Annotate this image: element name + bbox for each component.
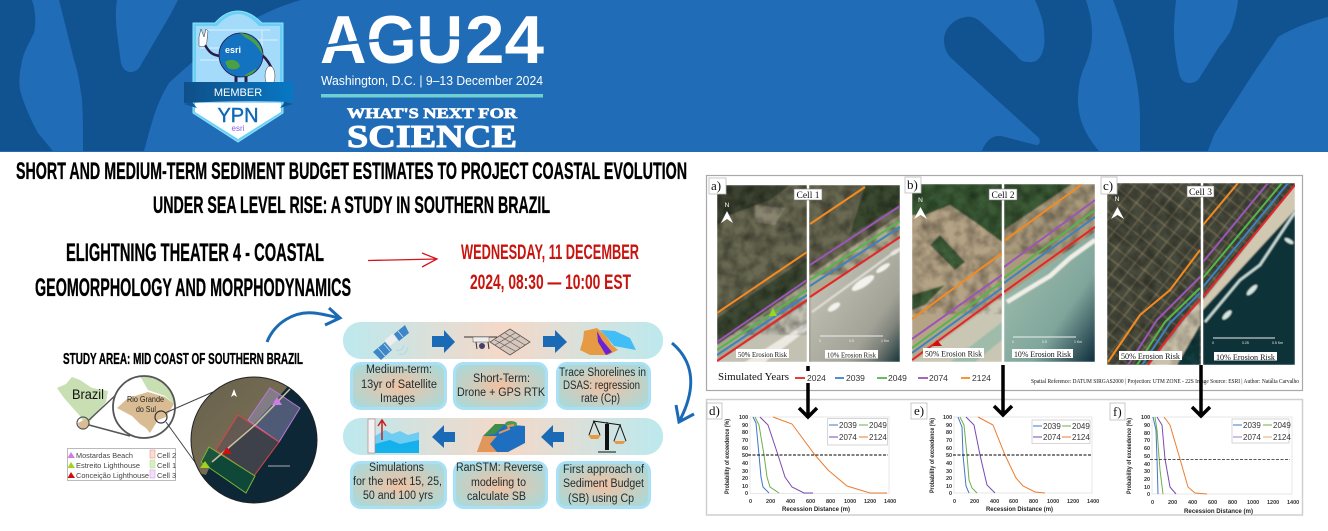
chart e: 20	[946, 476, 952, 482]
label e	[911, 403, 927, 419]
legend e: 2074	[1043, 433, 1061, 442]
chart d: Probability of exceedence (%)	[724, 419, 731, 494]
legend: simulated years: 2039	[846, 373, 865, 383]
label f	[1110, 403, 1125, 420]
chart f: 20	[1144, 477, 1150, 483]
chart e: 90	[946, 423, 952, 429]
cell 2 label: Cell 2	[992, 191, 1015, 201]
legend d	[828, 418, 888, 445]
map c: cell 3: 0	[1212, 341, 1214, 345]
icon: drone and survey grid	[464, 329, 530, 355]
chart f: 0	[1151, 500, 1154, 506]
legend: study area: Cell 1	[157, 461, 176, 470]
Brazil map: Brazil	[72, 386, 104, 402]
panel: exceedance charts	[706, 400, 1302, 515]
chart f: 90	[1144, 423, 1150, 429]
AGU24 logo: SCIENCE	[347, 118, 517, 154]
chart d: 200	[766, 499, 775, 505]
AGU24 logo: AGU	[320, 2, 463, 78]
title	[16, 158, 687, 219]
north arrow	[1111, 196, 1124, 219]
chart e: 100	[943, 415, 952, 421]
box: first approach: (SB) using Cp	[568, 493, 634, 505]
legend: simulated years: 2124	[972, 373, 991, 383]
icon: balance scale	[588, 421, 626, 452]
map dividers	[808, 198, 1202, 365]
chart d: 600	[806, 499, 815, 505]
box: first approach: Sediment Budget	[563, 478, 645, 490]
badge: Esri YPN member: YPN	[217, 105, 259, 127]
icon: terrain block model	[477, 421, 525, 452]
icon: sea level chart	[368, 419, 419, 453]
box: medium-term: Images	[380, 393, 415, 405]
arrow: session to date	[368, 253, 437, 267]
chart f: 60	[1144, 446, 1150, 452]
icon: satellite	[373, 325, 409, 360]
north arrow	[914, 197, 927, 219]
session name	[35, 239, 351, 302]
legend d: 2124	[869, 433, 887, 442]
chart e: 0	[949, 491, 952, 497]
map b: cell 2: 0.5	[1042, 340, 1047, 344]
label a: a)	[711, 178, 721, 193]
chart f: 40	[1144, 462, 1150, 468]
chart e: 200	[970, 499, 979, 505]
50% erosion label: 50% Erosion Risk	[1121, 352, 1180, 361]
box: trace shorelines: rate (Cp)	[581, 393, 620, 405]
north arrow	[721, 202, 733, 223]
legend: simulated years: 2074	[929, 373, 948, 383]
legend f: 2049	[1273, 421, 1291, 430]
chart f: Recession Distance (m)	[1184, 508, 1253, 515]
chart f: 70	[1144, 438, 1150, 444]
legend: study area: Estreito Lighthouse	[76, 461, 140, 470]
chart f: 400	[1188, 500, 1197, 506]
10% erosion label: 10% Erosion Risk	[1216, 353, 1275, 362]
chart d: 90	[742, 423, 748, 429]
label a	[709, 178, 726, 194]
chart d: 1200	[864, 499, 876, 505]
box: simulations: for the next 15, 25,	[353, 476, 442, 488]
box: medium-term: Medium-term:	[366, 364, 432, 376]
label c	[1101, 177, 1117, 194]
box: first approach	[558, 462, 650, 508]
map b: cell 2: 0	[1012, 340, 1014, 344]
arrow: study area to workflow	[267, 308, 340, 342]
chart e: 600	[1009, 499, 1018, 505]
box: trace shorelines: DSAS: regression	[563, 380, 640, 392]
map: study area locator	[57, 376, 317, 503]
chart e: 80	[946, 430, 952, 436]
north arrow: N	[918, 197, 923, 204]
panel: erosion risk maps	[706, 176, 1302, 390]
chart f: 1000	[1247, 500, 1259, 506]
arrow: drone to DSAS	[543, 330, 567, 353]
legend: study area	[68, 448, 176, 480]
legend f: 2074	[1243, 433, 1261, 442]
map c: cell 3: 0.5 Km	[1272, 341, 1283, 345]
chart f	[1110, 403, 1299, 515]
cell 3 label: Cell 3	[1189, 188, 1212, 198]
chart e: 0	[953, 499, 956, 505]
legend f: 2124	[1273, 433, 1291, 442]
chart d	[707, 403, 896, 513]
Rio Grande do Sul inset: do Sul	[136, 405, 156, 414]
box: RanSTM: modeling to	[471, 477, 526, 489]
arrow: cell 1 to chart d	[799, 366, 817, 417]
chart d: 60	[742, 446, 748, 452]
box: simulations: 50 and 100 yrs	[363, 490, 433, 502]
ribbon: MEMBER	[214, 87, 262, 99]
arrow: model to simulations	[432, 425, 455, 448]
chart f: 600	[1208, 500, 1217, 506]
chart f: 100	[1141, 415, 1150, 421]
chart d: 0	[749, 499, 752, 505]
chart d: Recession Distance (m)	[782, 506, 850, 513]
legend d: 2039	[839, 421, 857, 430]
chart f: 50	[1144, 454, 1150, 460]
arrow: workflow row 1 to row 2	[672, 343, 694, 422]
box: medium-term	[352, 364, 446, 408]
legend: simulated years: 2049	[888, 373, 907, 383]
map a: cell 1: 0	[819, 339, 821, 343]
legend: simulated years: Simulated Years	[718, 371, 789, 383]
box: short-term: Short-Term:	[473, 373, 530, 385]
legend d: 2074	[839, 433, 857, 442]
map credits: Spatial Reference: DATUM SIRGAS2000 | Projection: UTM ZONE - 22S Image Source: ESRI | Author: Natália Carvalho	[1031, 378, 1299, 385]
chart d: 1400	[884, 499, 896, 505]
legend e: 2124	[1072, 433, 1090, 442]
50% erosion label: 50% Erosion Risk	[738, 350, 787, 359]
chart e: 30	[946, 469, 952, 475]
globe mascot: esri	[225, 45, 241, 55]
session name: GEOMORPHOLOGY AND MORPHODYNAMICS	[35, 274, 351, 302]
box: trace shorelines	[558, 364, 650, 408]
arrow: satellite to drone	[432, 330, 455, 353]
chart d: 1000	[844, 499, 856, 505]
50% erosion label: 50% Erosion Risk	[925, 350, 982, 358]
chart e: 60	[946, 446, 952, 452]
satellite map circle with cells	[188, 377, 317, 503]
legend: study area: Cell 2	[157, 451, 176, 460]
chart e: 800	[1029, 499, 1038, 505]
box: short-term	[454, 364, 546, 408]
Brazil map	[57, 377, 108, 429]
box: RanSTM: RanSTM: Reverse	[456, 462, 543, 474]
chart f: 10	[1144, 485, 1150, 491]
chart e: 10	[946, 484, 952, 490]
header band	[0, 0, 1328, 152]
legend: study area: Mostardas Beach	[76, 451, 133, 460]
session date and time	[461, 241, 639, 294]
title: SHORT AND MEDIUM-TERM SEDIMENT BUDGET ESTIMATES TO PROJECT COASTAL EVOLUTION	[16, 158, 687, 185]
AGU24 logo: Washington, D.C. | 9–13 December 2024	[321, 73, 543, 88]
badge: Esri YPN member	[184, 11, 293, 142]
icon: shoreline trace map	[580, 328, 636, 355]
chart d: 50	[742, 453, 748, 459]
legend: study area: Cell 3	[157, 471, 176, 480]
label c: c)	[1103, 178, 1113, 193]
label b	[905, 177, 921, 193]
legend f: 2039	[1243, 421, 1261, 430]
box: simulations	[352, 462, 446, 508]
north arrow: N	[725, 202, 730, 209]
chart e: 1400	[1087, 499, 1099, 505]
AGU24 logo: WHAT'S NEXT FOR	[347, 106, 517, 122]
arrow: budget to model	[541, 425, 564, 448]
chart e: 1000	[1047, 499, 1059, 505]
chart d: 0	[745, 491, 748, 497]
arrow: cell 2 to chart e	[994, 365, 1012, 415]
chart f: 30	[1144, 469, 1150, 475]
session date and time: 2024, 08:30 — 10:00 EST	[470, 271, 631, 294]
box: trace shorelines: Trace Shorelines in	[559, 367, 646, 379]
map c: cell 3	[1101, 177, 1295, 365]
label e: e)	[914, 403, 924, 418]
arrow: cell 3 to chart f	[1192, 365, 1210, 416]
label d	[707, 403, 722, 419]
chart d: 30	[742, 469, 748, 475]
heading: study area: STUDY AREA: MID COAST OF SOUTHERN BRAZIL	[63, 351, 303, 368]
Rio Grande do Sul inset	[113, 376, 175, 438]
chart f: 800	[1228, 500, 1237, 506]
legend: simulated years: 2024	[807, 373, 826, 383]
legend d: 2049	[869, 421, 887, 430]
chart f: 1200	[1267, 500, 1279, 506]
cell 2 label	[989, 189, 1017, 201]
legend e: 2049	[1072, 422, 1090, 431]
box: RanSTM: calculate SB	[467, 491, 526, 503]
AGU24 logo	[320, 2, 544, 154]
chart d: 10	[742, 484, 748, 490]
label f: f)	[1113, 404, 1122, 419]
chart d: 800	[826, 499, 835, 505]
chart d: 100	[739, 415, 748, 421]
label d: d)	[709, 403, 720, 418]
box: first approach: First approach of	[563, 464, 645, 476]
chart f: 1400	[1287, 500, 1299, 506]
box: medium-term: 13yr of Satellite	[361, 379, 437, 391]
AGU24 logo: 24	[465, 2, 544, 78]
chart f: 80	[1144, 431, 1150, 437]
chart f: 200	[1168, 500, 1177, 506]
panel: workflow row 2	[343, 418, 663, 455]
legend e: 2039	[1043, 422, 1061, 431]
cell 1 label: Cell 1	[796, 191, 820, 201]
chart e: 70	[946, 438, 952, 444]
chart e: 50	[946, 453, 952, 459]
Rio Grande do Sul inset: Rio Grande	[127, 395, 164, 404]
north arrow: N	[1115, 196, 1120, 203]
panel: workflow row 1	[343, 322, 663, 360]
chart e: 1200	[1067, 499, 1079, 505]
chart d: 70	[742, 438, 748, 444]
map b: cell 2: 1 Km	[1074, 340, 1082, 344]
legend: study area: Conceição Lighthouse	[76, 471, 149, 480]
box: simulations: Simulations	[369, 462, 424, 474]
chart d: 400	[786, 499, 795, 505]
chart e: 400	[990, 499, 999, 505]
map a: cell 1: 1 Km	[881, 339, 889, 343]
badge: Esri YPN member: esri	[232, 124, 245, 133]
chart d: 80	[742, 430, 748, 436]
map b: cell 2	[905, 177, 1095, 362]
legend: simulated years	[718, 371, 991, 383]
chart e: 40	[946, 461, 952, 467]
title: UNDER SEA LEVEL RISE: A STUDY IN SOUTHERN BRAZIL	[153, 192, 550, 219]
label b: b)	[907, 177, 918, 192]
session date and time: WEDNESDAY, 11 DECEMBER	[461, 241, 639, 264]
10% erosion label: 10% Erosion Risk	[827, 350, 876, 360]
session name: ELIGHTNING THEATER 4 - COASTAL	[66, 239, 324, 267]
chart f: 0	[1147, 492, 1150, 498]
map c: cell 3: 0.25	[1242, 341, 1249, 345]
legend e	[1032, 420, 1090, 444]
box: short-term: Drone + GPS RTK	[457, 387, 545, 399]
chart f: Probability of exceedence (%)	[1126, 418, 1133, 494]
chart e: Recession Distance (m)	[986, 506, 1053, 513]
legend f	[1232, 419, 1291, 443]
chart d: 40	[742, 461, 748, 467]
chart e: Probability of exceedence (%)	[929, 418, 936, 493]
chart d: 20	[742, 476, 748, 482]
map a: cell 1	[709, 178, 901, 362]
box: RanSTM	[454, 462, 546, 508]
chart e	[911, 403, 1099, 513]
cell 1 label	[794, 189, 822, 201]
map a: cell 1: 0.5	[849, 339, 854, 343]
10% erosion label: 10% Erosion Risk	[1014, 350, 1071, 359]
